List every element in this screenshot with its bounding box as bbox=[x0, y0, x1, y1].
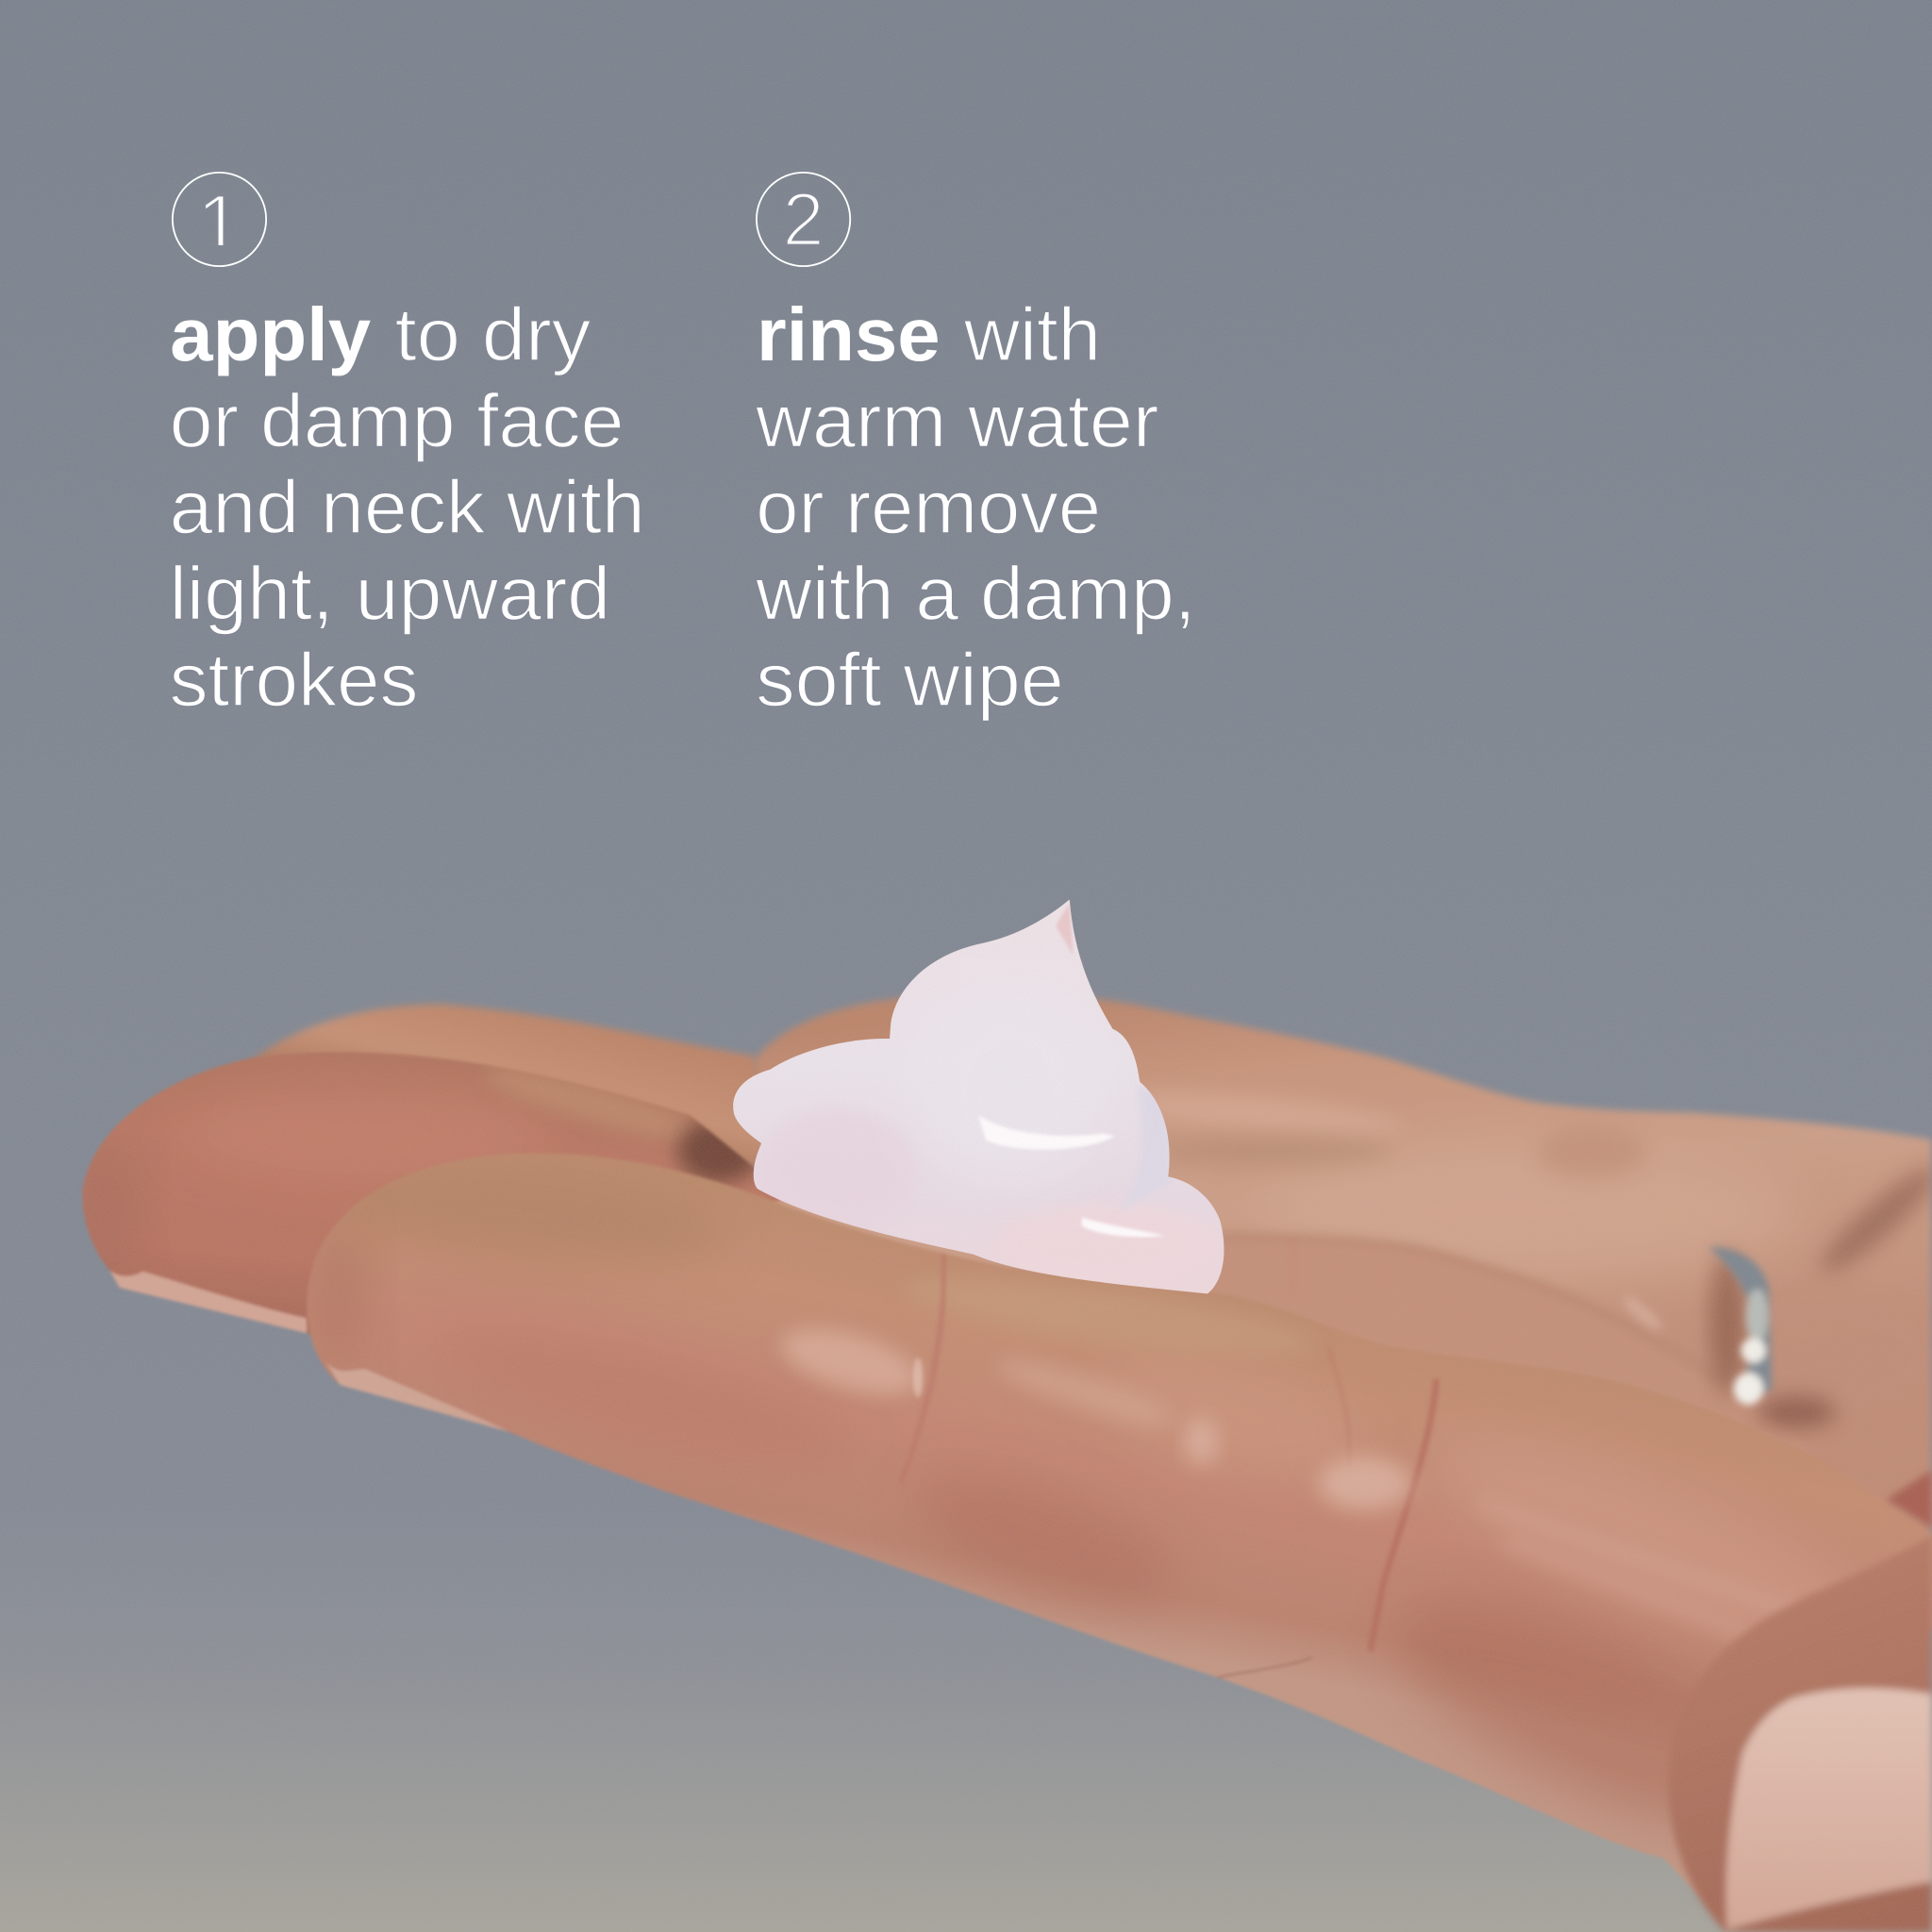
cream dollop bbox=[733, 899, 1224, 1293]
step 1 text: or damp face bbox=[170, 378, 625, 462]
step 2 text: rinse bbox=[757, 292, 941, 376]
rear finger above the upper left finger bbox=[249, 1004, 789, 1183]
step 1 bbox=[170, 173, 645, 722]
step 1 text bbox=[170, 292, 645, 722]
knuckle creases bbox=[901, 1253, 944, 1484]
hand bbox=[73, 994, 1932, 1932]
step 1 text: apply bbox=[170, 292, 371, 376]
step 2 text: or remove bbox=[756, 465, 1101, 549]
cream highlights bbox=[978, 1115, 1115, 1149]
skin highlights bbox=[779, 1324, 916, 1400]
step 2 text bbox=[755, 292, 1196, 722]
step 1 text: to dry bbox=[395, 292, 591, 376]
step 2 text: with a damp, bbox=[755, 551, 1196, 635]
number badge 2: 2 bbox=[782, 177, 824, 261]
step 1 text: strokes bbox=[170, 638, 418, 722]
number badge 1: 1 bbox=[197, 178, 242, 269]
step 2 text: warm water bbox=[755, 378, 1158, 462]
ring bbox=[1709, 1247, 1772, 1405]
number badge 2 bbox=[757, 173, 850, 266]
thumb and nail bbox=[1669, 1470, 1932, 1932]
step 2 text: with bbox=[963, 292, 1101, 376]
step 2 bbox=[755, 173, 1196, 722]
upper left finger bbox=[73, 1052, 789, 1356]
number badge 1 bbox=[173, 173, 266, 269]
step 2 text: soft wipe bbox=[756, 638, 1064, 722]
rear fingers and palm bbox=[753, 994, 1932, 1539]
step 1 text: light, upward bbox=[170, 551, 610, 635]
step 1 text: and neck with bbox=[170, 465, 645, 549]
front finger bbox=[305, 1148, 1932, 1923]
